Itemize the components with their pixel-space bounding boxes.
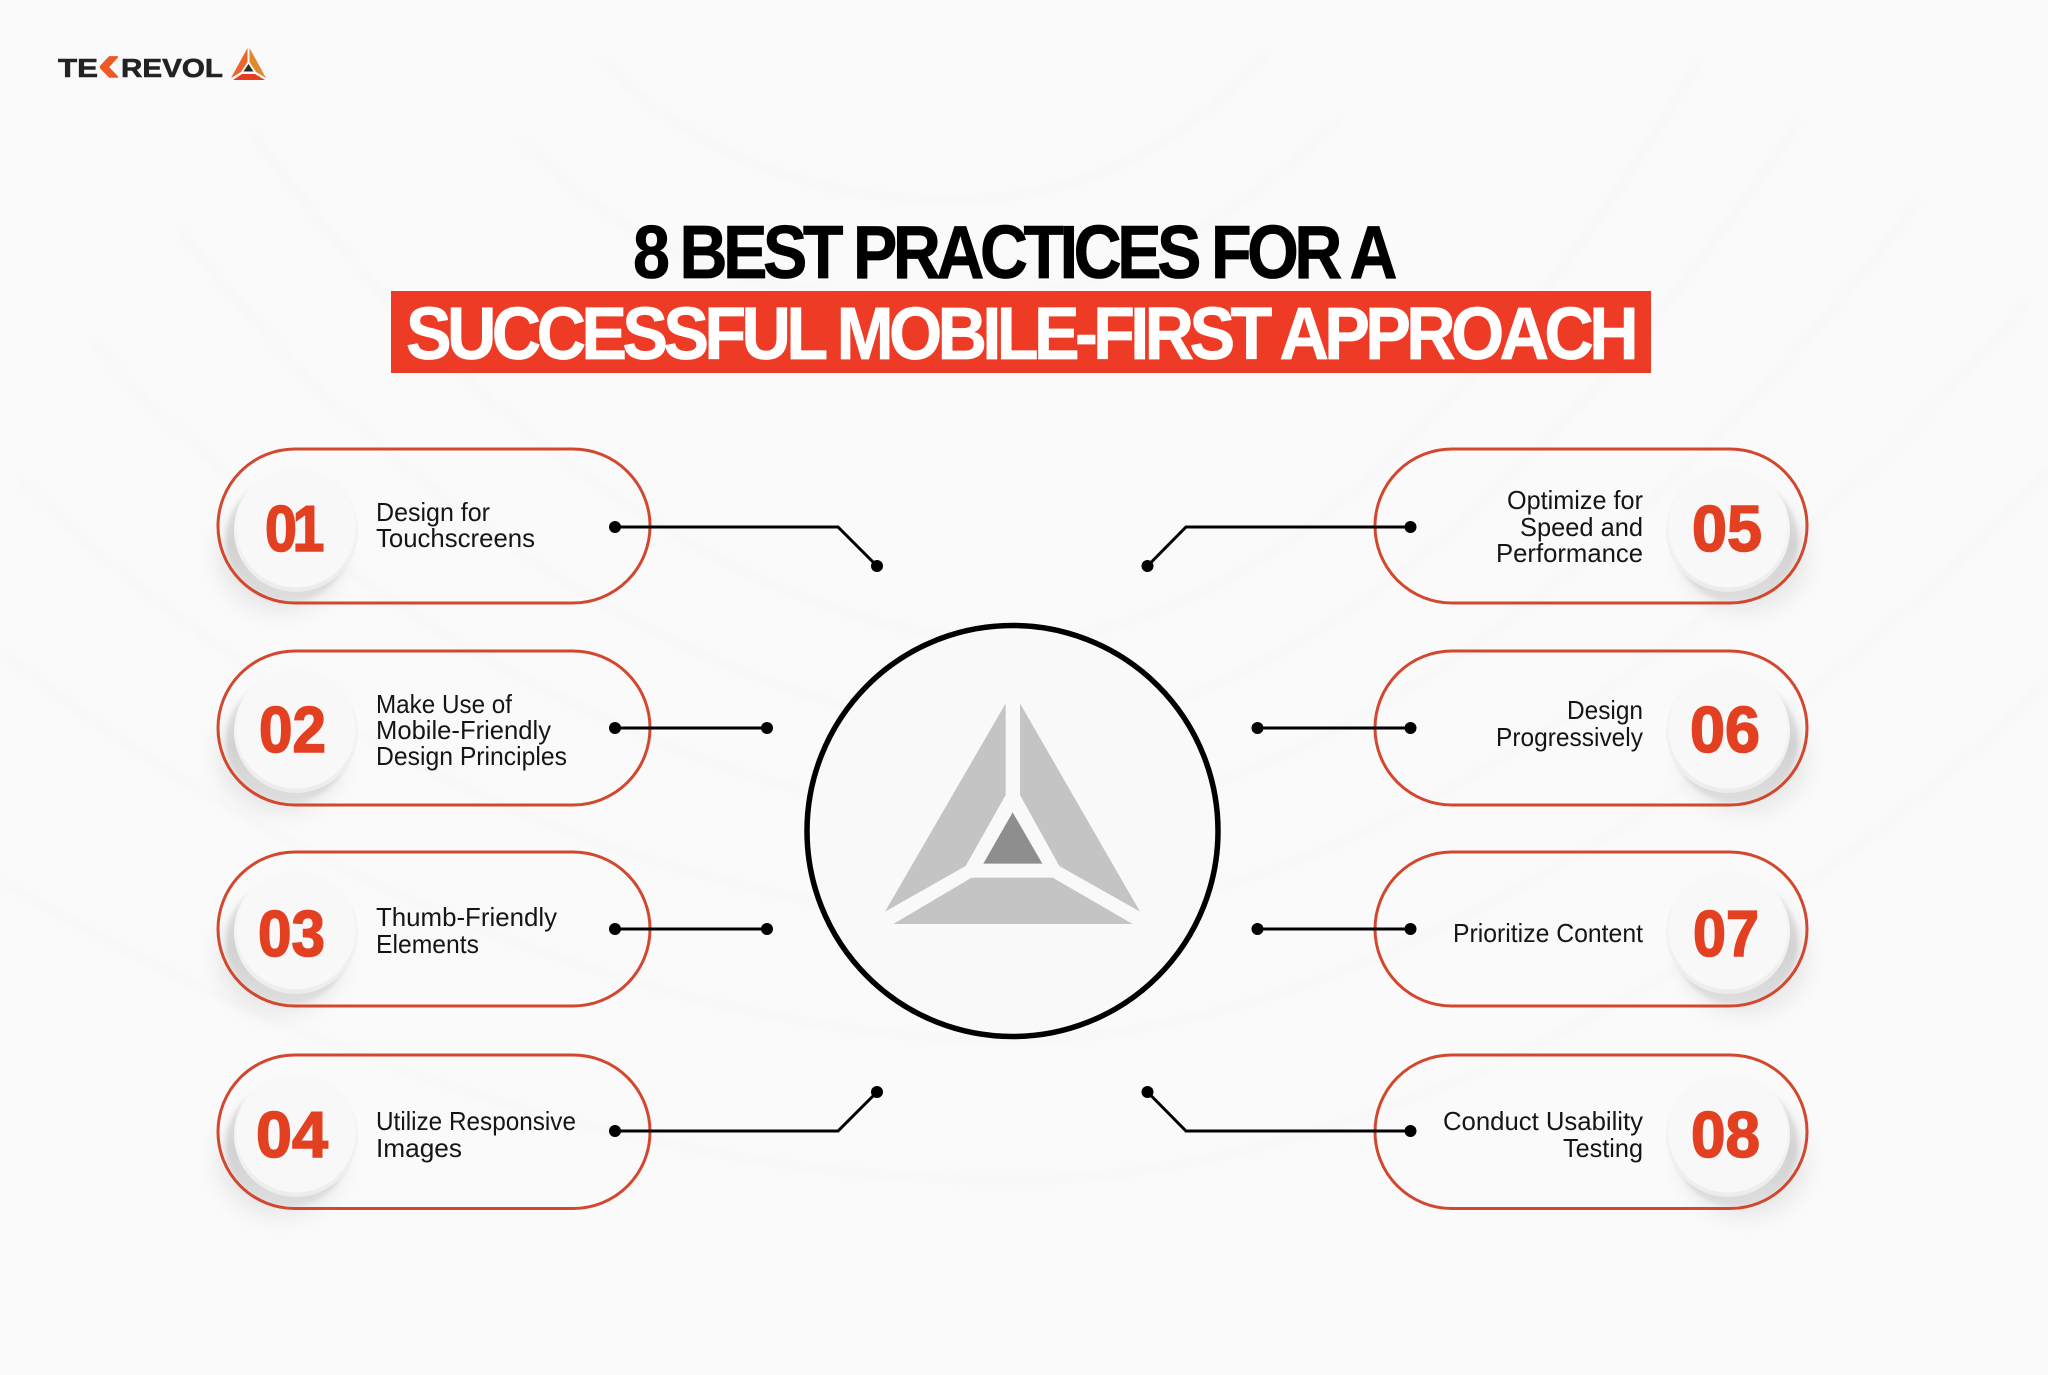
logo triangle mark	[231, 48, 266, 80]
label 04: Images	[376, 1133, 462, 1163]
label 02: Make Use of	[376, 689, 513, 719]
title line 1: 8 BEST PRACTICES FOR A	[633, 210, 1396, 294]
center circle	[807, 626, 1218, 1036]
pill outline 01	[218, 449, 650, 603]
badge 01	[234, 468, 358, 592]
label 02: Design Principles	[376, 741, 567, 771]
label 01	[376, 497, 535, 553]
logo wordmark: REVOL	[121, 53, 223, 83]
title line 2: SUCCESSFUL MOBILE-FIRST APPROACH	[406, 292, 1635, 375]
label 03	[376, 902, 557, 959]
label 08: Conduct Usability	[1443, 1106, 1643, 1136]
item 03	[218, 852, 773, 1013]
badge 06	[1666, 669, 1790, 793]
connector 07	[1252, 923, 1416, 935]
item 02	[218, 651, 773, 812]
item 04	[218, 1055, 883, 1216]
label 04: Utilize Responsive	[376, 1106, 576, 1136]
label 05: Performance	[1496, 538, 1643, 568]
label 08: Testing	[1563, 1133, 1643, 1163]
label 06: Design	[1567, 695, 1643, 725]
label 05: Speed and	[1520, 512, 1643, 542]
number 05: 05	[1692, 492, 1762, 565]
item 05	[1142, 449, 1807, 611]
badge 02	[234, 669, 358, 793]
item 01	[218, 449, 883, 611]
label 06	[1496, 695, 1643, 752]
connector 04	[609, 1086, 883, 1137]
connector 01	[609, 521, 883, 572]
badge 03	[234, 870, 358, 994]
label 03: Thumb-Friendly	[376, 902, 557, 932]
label 03: Elements	[376, 929, 479, 959]
pill outline 06	[1375, 651, 1807, 805]
badge shadow 03	[218, 880, 350, 1013]
number 01: 01	[265, 492, 323, 565]
title highlight bar	[391, 291, 1651, 373]
number 08: 08	[1691, 1098, 1760, 1171]
label 01: Touchscreens	[376, 523, 535, 553]
label 07: Prioritize Content	[1453, 918, 1644, 948]
title	[391, 210, 1651, 375]
label 02	[376, 689, 567, 771]
badge shadow 07	[1674, 880, 1807, 1013]
badge 07	[1666, 870, 1790, 994]
label 05	[1496, 485, 1643, 568]
connector 08	[1142, 1086, 1416, 1137]
pill outline 02	[218, 651, 650, 805]
center triangle mark	[885, 703, 1140, 924]
number 04: 04	[256, 1098, 328, 1171]
pill outline 05	[1375, 449, 1807, 603]
logo wordmark	[58, 33, 223, 93]
item 07	[1252, 852, 1807, 1013]
pill outline 07	[1375, 852, 1807, 1006]
connector 03	[609, 923, 773, 935]
item 06	[1252, 651, 1807, 812]
number 06: 06	[1690, 693, 1760, 766]
label 04	[376, 1106, 576, 1163]
label 08	[1443, 1106, 1643, 1163]
logo wordmark: ‹	[97, 33, 121, 93]
badge shadow 08	[1674, 1083, 1807, 1216]
badge 04	[234, 1073, 358, 1197]
label 05: Optimize for	[1507, 485, 1643, 515]
badge shadow 06	[1674, 679, 1807, 812]
connector 06	[1252, 722, 1416, 734]
label 02: Mobile-Friendly	[376, 715, 551, 745]
badge shadow 02	[218, 679, 350, 812]
pill outline 04	[218, 1055, 650, 1208]
item 08	[1142, 1055, 1807, 1216]
pill outline 08	[1375, 1055, 1807, 1208]
badge 05	[1666, 468, 1790, 592]
logo: Tekrevol	[58, 33, 266, 93]
number 07: 07	[1693, 897, 1759, 970]
badge shadow 05	[1674, 478, 1807, 611]
number 02: 02	[259, 693, 326, 766]
badge shadow 04	[218, 1083, 350, 1216]
label 01: Design for	[376, 497, 490, 527]
badge 08	[1666, 1073, 1790, 1197]
center circle with logo	[807, 626, 1218, 1036]
badge shadow 01	[218, 478, 350, 611]
label 06: Progressively	[1496, 722, 1643, 752]
number 03: 03	[258, 897, 325, 970]
connector 05	[1142, 521, 1416, 572]
logo wordmark: TE	[58, 53, 98, 83]
pill outline 03	[218, 852, 650, 1006]
connector 02	[609, 722, 773, 734]
